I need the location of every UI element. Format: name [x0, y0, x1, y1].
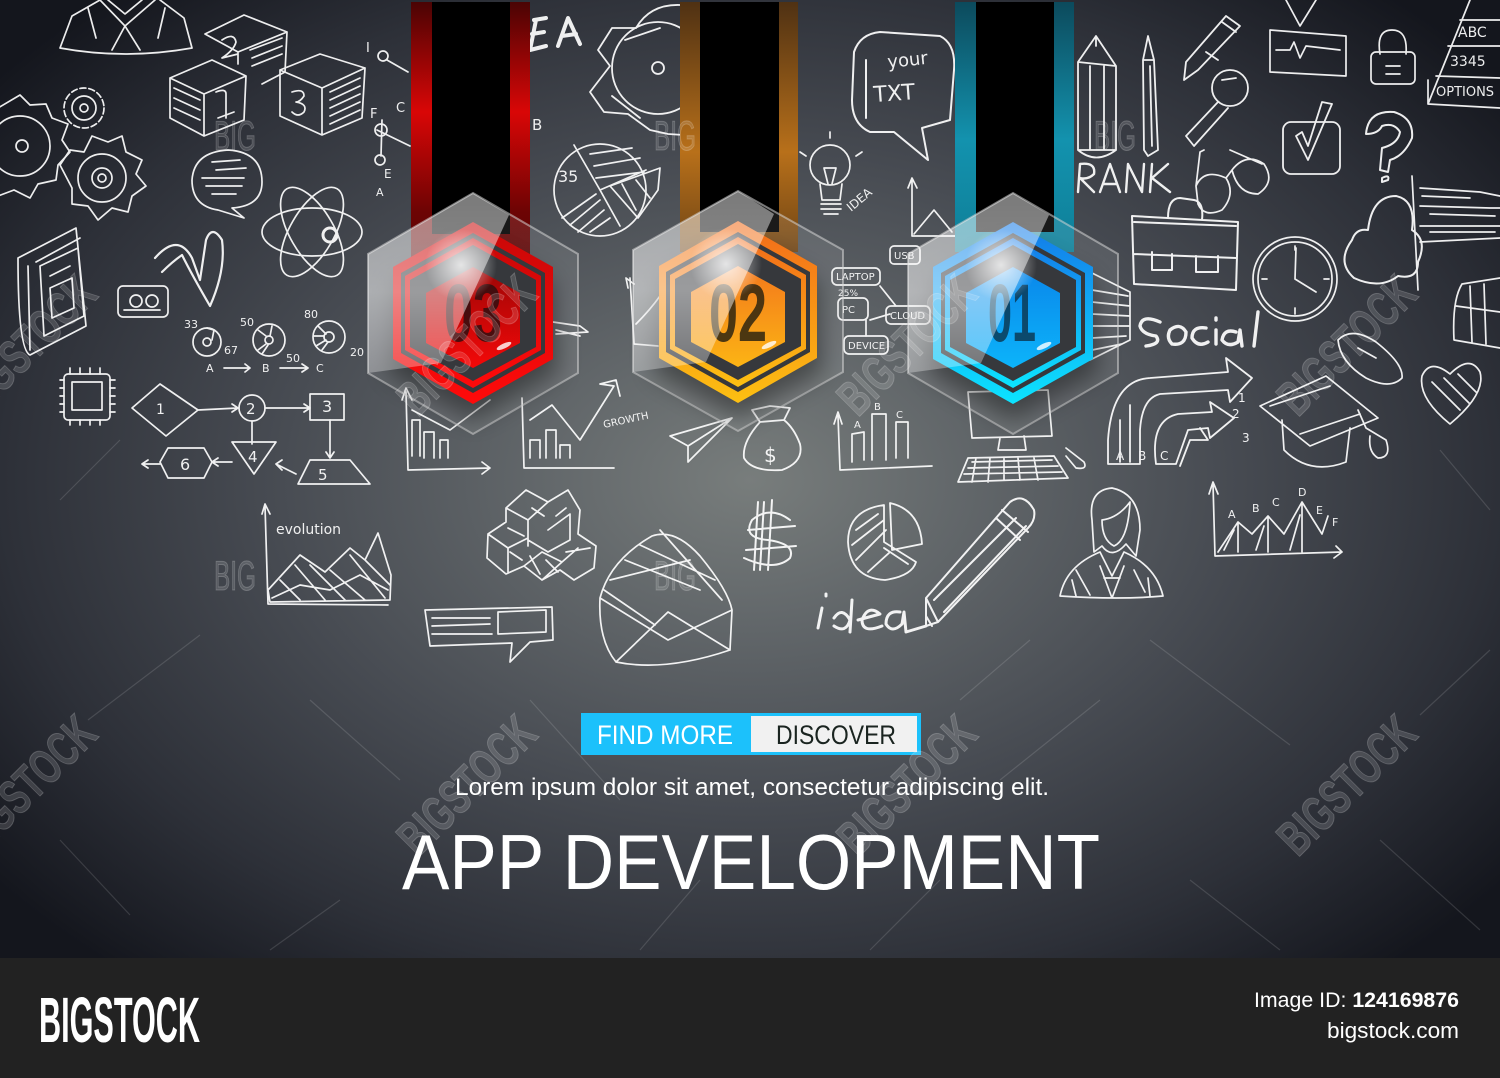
doodle: letters and knots: F — [370, 107, 377, 122]
doodle: big arrow ABC — [1108, 358, 1252, 466]
doodle: rank word — [1078, 164, 1170, 192]
doodle: letters and knots: A — [376, 186, 384, 199]
watermarks: BIGSTOCK — [386, 265, 547, 426]
doodle: letters and knots: I — [366, 41, 370, 56]
doodle: device labels: PC — [842, 305, 855, 316]
doodle: pyramid chart: ABC — [1458, 25, 1487, 41]
watermarks: BIG — [214, 552, 256, 599]
doodle: growth chart — [522, 380, 650, 468]
number: 02 — [709, 268, 767, 359]
doodle sketches — [0, 0, 1500, 665]
doodle: flowchart: 1 — [156, 402, 165, 418]
hex rings — [933, 222, 1093, 404]
doodle: big pencil — [926, 498, 1034, 626]
doodle: line chart ABCDEF: C — [1272, 496, 1280, 509]
doodle: donut charts: 80 — [304, 308, 318, 321]
doodle: pyramid chart: 3345 — [1450, 54, 1486, 70]
doodle: idea letters — [530, 18, 580, 50]
doodle: curly shape — [155, 232, 223, 306]
doodle: pie 35 — [554, 144, 660, 236]
corner sparkle — [761, 339, 777, 351]
doodle: donut charts: 50 — [240, 316, 254, 329]
doodle: line chart ABCDEF: F — [1332, 516, 1338, 529]
doodle: question mark — [1366, 112, 1412, 182]
doodle: laptop lines behind badge one — [1090, 272, 1130, 360]
doodle: monitor — [1270, 0, 1346, 76]
number: 01 — [988, 268, 1036, 359]
doodle: device labels: USB — [894, 251, 915, 262]
doodle: triangle chart — [908, 178, 955, 236]
image id: Image ID: 124169876 — [1254, 989, 1459, 1012]
badge shadow — [928, 243, 1098, 421]
footer bar: BIGSTOCK — [39, 984, 200, 1056]
doodle: pie chart — [848, 503, 922, 580]
doodle: large gear — [590, 5, 704, 136]
doodle: evolution chart — [262, 504, 391, 605]
doodle: flowchart — [132, 384, 370, 484]
doodle: evolution chart: evolution — [276, 522, 341, 538]
glass gloss — [633, 191, 774, 372]
doodle: graduation cap — [1260, 376, 1388, 467]
doodle: social word — [1140, 312, 1258, 346]
doodle: donut charts: 33 — [184, 318, 198, 331]
doodle: your text bubble: your — [886, 48, 929, 73]
doodle: dollar sign — [744, 500, 796, 570]
watermarks: BIGSTOCK — [1266, 265, 1427, 426]
glass hexagon — [633, 191, 843, 431]
doodle: magnifier — [1186, 70, 1248, 146]
doodle: flowchart: 4 — [248, 448, 258, 466]
site url: bigstock.com — [1327, 1018, 1459, 1043]
doodle: donut charts — [184, 308, 364, 375]
doodle: device labels: DEVICE — [848, 341, 885, 352]
doodle: big arrow ABC: B — [1138, 449, 1146, 463]
gloss highlight — [425, 229, 497, 301]
doodle: lightbulb — [800, 132, 875, 214]
doodle: money bag — [744, 406, 801, 470]
doodle: cloud — [1344, 196, 1422, 284]
doodle: padlock — [1371, 30, 1415, 84]
watermarks: BIG — [214, 112, 256, 159]
doodle: woman avatar — [1060, 488, 1163, 598]
find more label: FIND MORE — [597, 720, 733, 750]
glass gloss — [908, 193, 1049, 373]
doodle: tall pencil — [1078, 36, 1116, 158]
doodle: chart behind badge two — [626, 278, 660, 346]
ribbon: 03 — [411, 2, 530, 264]
doodle: your text bubble: TXT — [872, 80, 916, 108]
doodle: donut charts: B — [262, 362, 270, 375]
doodle: pie fragment right — [1454, 278, 1500, 348]
doodle: slim pen — [1143, 36, 1158, 156]
doodle: bar chart left — [402, 388, 490, 474]
subtitle: Lorem ipsum dolor sit amet, consectetur adipiscing elit. — [455, 774, 1049, 801]
glass gloss — [368, 193, 509, 373]
ribbon: 02 — [680, 2, 798, 252]
doodle: flowchart: 2 — [246, 400, 256, 418]
doodle: donut charts: 20 — [350, 346, 364, 359]
doodle: envelope — [600, 530, 732, 665]
doodle: growth chart: GROWTH — [602, 411, 650, 431]
doodle: dice 1 — [170, 60, 246, 136]
doodle: letters and knots: B — [532, 116, 542, 134]
footer bar — [0, 958, 1500, 1078]
doodle: cassette — [118, 286, 168, 317]
doodle: line chart ABCDEF: B — [1252, 502, 1260, 515]
doodle: letters and knots — [366, 41, 542, 199]
watermarks — [0, 112, 1427, 866]
glass hexagon — [368, 193, 578, 434]
doodle: dice 3 — [280, 54, 365, 135]
corner sparkle — [496, 340, 512, 352]
doodle: bar chart center: B — [874, 402, 881, 413]
doodle: chat box — [425, 607, 553, 662]
doodle: line chart ABCDEF — [1209, 482, 1342, 558]
doodle: gears left — [0, 88, 146, 220]
doodle: line chart ABCDEF: A — [1228, 508, 1236, 521]
doodle: glasses — [1196, 150, 1269, 213]
doodle: big arrow ABC: A — [1116, 449, 1125, 463]
watermarks: BIGSTOCK — [1266, 705, 1427, 866]
doodle: heart — [1422, 363, 1481, 424]
watermarks: BIGSTOCK — [826, 705, 987, 866]
doodle: device labels — [832, 246, 930, 354]
doodle: pie 35: 35 — [558, 167, 578, 186]
doodle: money bag: $ — [764, 443, 777, 467]
doodle: your text bubble — [852, 32, 954, 160]
doodle: book lines behind badge three — [553, 322, 588, 336]
doodle: big arrow ABC: 3 — [1242, 431, 1250, 445]
doodle: donut charts: A — [206, 362, 214, 375]
doodle: flowchart: 5 — [318, 466, 328, 484]
doodle: donut charts: 50 — [286, 352, 300, 365]
button: find more / discover — [581, 713, 921, 755]
doodle: line chart ABCDEF: D — [1298, 486, 1306, 499]
doodle: device labels: CLOUD — [890, 311, 925, 322]
watermarks: BIG — [654, 552, 696, 599]
doodle: flowchart: 6 — [180, 455, 190, 474]
doodle: bar chart center: A — [854, 420, 861, 431]
badge: 01 — [908, 193, 1118, 434]
badge: 03 — [368, 193, 578, 434]
doodle: bar chart center: C — [896, 410, 903, 421]
watermarks: BIG — [1094, 112, 1136, 159]
doodle: device labels: 25% — [838, 289, 858, 299]
number: 03 — [444, 268, 502, 359]
watermarks: BIGSTOCK — [386, 705, 547, 866]
doodle: dice 2 — [205, 15, 287, 84]
doodle: desktop computer — [958, 390, 1085, 482]
doodle: signpost — [1412, 176, 1500, 290]
doodle: paper plane — [670, 418, 732, 462]
doodle: donut charts: 67 — [224, 344, 238, 357]
watermarks: BIG — [654, 112, 696, 159]
doodle: letters and knots: C — [396, 101, 405, 116]
doodle: letters and knots: E — [384, 167, 392, 181]
doodle: check box — [1283, 102, 1340, 174]
doodle: briefcase — [1132, 198, 1238, 290]
doodle: suit figure — [60, 0, 192, 54]
badge shadow — [653, 242, 823, 420]
glass hexagon — [908, 193, 1118, 434]
doodle: donut charts: C — [316, 362, 324, 375]
doodle: line chart ABCDEF: E — [1316, 504, 1323, 517]
doodle: clock — [1253, 237, 1337, 321]
watermarks: BIGSTOCK — [826, 265, 987, 426]
doodle: speech bubble list — [192, 150, 262, 218]
badge shadow — [388, 243, 558, 421]
doodle: isometric cubes — [487, 490, 596, 580]
doodle: lightbulb: IDEA — [844, 185, 875, 214]
doodle: atom — [262, 178, 362, 286]
hex rings — [393, 222, 553, 404]
doodle: device labels: LAPTOP — [836, 272, 875, 283]
doodle: mouse — [1338, 333, 1402, 384]
corner sparkle — [1036, 340, 1052, 352]
ribbon: 01 — [955, 2, 1074, 252]
doodle: idea word — [818, 594, 926, 632]
doodle: pyramid chart — [1428, 0, 1500, 108]
discover label: DISCOVER — [776, 720, 896, 750]
doodle: bar chart center — [834, 402, 932, 470]
hex rings — [659, 221, 817, 403]
doodle: big arrow ABC: 2 — [1232, 407, 1240, 421]
doodle: pen — [1184, 16, 1240, 80]
doodle: book — [18, 228, 86, 355]
title: APP DEVELOPMENT — [402, 818, 1100, 906]
doodle: pyramid chart: OPTIONS — [1436, 85, 1494, 100]
gloss highlight — [690, 228, 762, 300]
doodle: big arrow ABC: C — [1160, 449, 1168, 463]
gloss highlight — [965, 229, 1037, 301]
doodle: big arrow ABC: 1 — [1238, 391, 1246, 405]
badge: 02 — [633, 191, 843, 431]
doodle: flowchart: 3 — [322, 397, 332, 416]
doodle: chip — [60, 368, 115, 425]
